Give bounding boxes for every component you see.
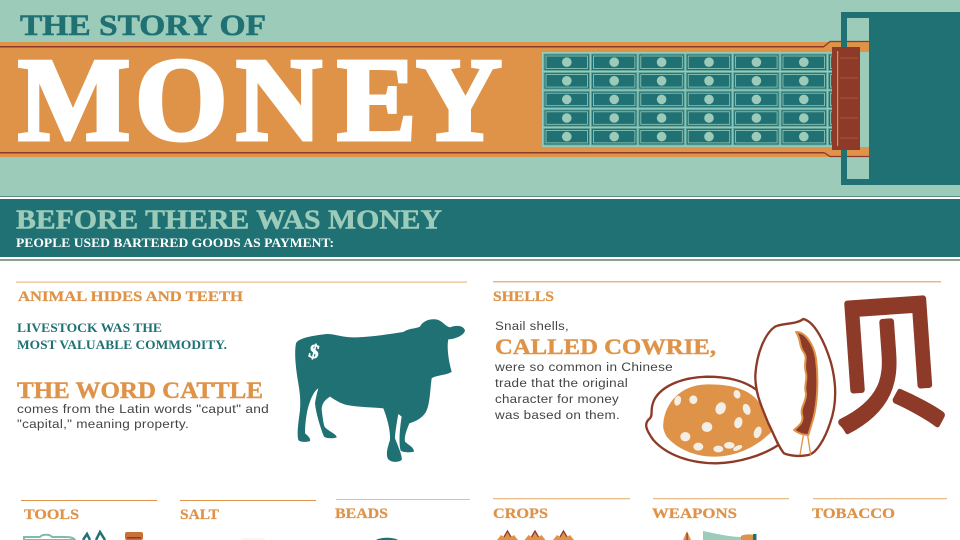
section heading: BEFORE THERE WAS MONEY [16, 204, 442, 234]
panel: tools [21, 500, 157, 540]
icon: beads [376, 538, 398, 540]
heading: weapons: WEAPONS [652, 506, 737, 522]
rows of banknotes [542, 52, 874, 147]
cowrie explanation [494, 360, 673, 422]
heading: beads: BEADS [335, 506, 388, 522]
called cowrie heading: CALLED COWRIE, [495, 334, 716, 359]
dollar brand: $ [306, 340, 322, 364]
section banner [0, 199, 960, 261]
belt end panel [841, 12, 960, 185]
heading: animal hides: ANIMAL HIDES AND TEETH [18, 289, 244, 305]
header banner [0, 0, 960, 199]
section subheading: PEOPLE USED BARTERED GOODS AS PAYMENT: [16, 236, 334, 250]
icon: salt pile [241, 538, 265, 540]
panel: animal hides and teeth [16, 282, 467, 462]
title: money: MONEY [18, 34, 502, 166]
cattle explanation: comes from the Latin words "caput" and [17, 402, 269, 416]
panel: tobacco [812, 498, 947, 522]
icon: crop leaves [497, 530, 574, 540]
heading: tools: TOOLS [24, 507, 79, 523]
snail shells text: Snail shells, [495, 319, 569, 333]
livestock statement: LIVESTOCK WAS THE [17, 320, 162, 335]
panel: salt [180, 500, 316, 540]
heading: salt: SALT [180, 507, 219, 523]
chinese character for money: 贝 [823, 244, 955, 463]
icon: tools [24, 532, 143, 540]
cattle explanation: "capital," meaning property. [17, 417, 189, 431]
panel: shells [493, 244, 955, 463]
panel: weapons [652, 498, 789, 540]
icon: cowrie shells [646, 319, 835, 463]
belt strap block [869, 12, 960, 185]
panel: beads [335, 499, 470, 540]
heading: crops: CROPS [493, 506, 548, 522]
cattle explanation [17, 402, 269, 431]
belt clasp [832, 47, 860, 150]
heading: shells: SHELLS [493, 289, 554, 305]
livestock statement: MOST VALUABLE COMMODITY. [17, 337, 227, 352]
money belt band [0, 41, 869, 157]
livestock statement [17, 320, 227, 352]
cowrie explanation: character for money [495, 392, 620, 406]
heading: tobacco: TOBACCO [812, 506, 895, 522]
icon: weapons [683, 531, 756, 540]
the word cattle heading: THE WORD CATTLE [17, 378, 263, 403]
cowrie explanation: trade that the original [495, 376, 628, 390]
cowrie explanation: was based on them. [494, 408, 620, 422]
cowrie explanation: were so common in Chinese [494, 360, 673, 374]
title: the story of: THE STORY OF [20, 9, 266, 42]
panel: crops [493, 498, 630, 540]
icon: cow silhouette [295, 319, 465, 462]
